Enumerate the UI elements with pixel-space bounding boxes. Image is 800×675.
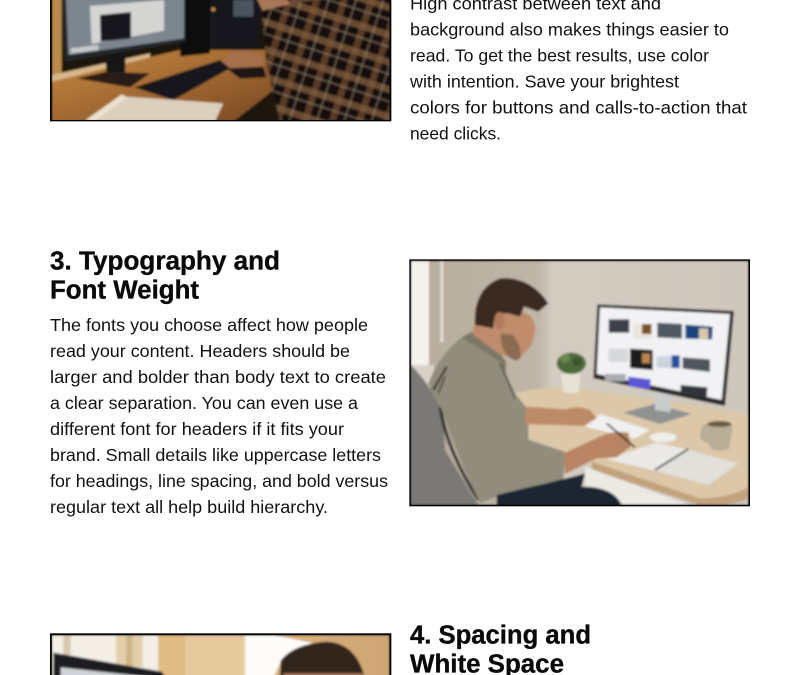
body text: typography section: regular text all help build hierarchy. [50,497,328,517]
photo: man at desk with plaid shirt and monitor [50,0,391,122]
body text: color section [409,0,747,144]
body text: typography section: The fonts you choose affect how people [50,315,368,335]
heading: 3. Typography and Font Weight: Font Weight [50,276,200,304]
body text: color section: with intention. Save your brightest [409,72,679,92]
body text: color section: colors for buttons and calls-to-action that [410,98,747,118]
body text: typography section: for headings, line spacing, and bold versus [50,471,388,491]
body text: typography section: a clear separation. You can even use a [50,393,358,413]
photo: man taking notes at desk with website on monitor [409,259,750,506]
heading: 3. Typography and Font Weight: 3. Typography and [50,248,280,276]
body text: color section: need clicks. [410,124,501,144]
body text: typography section: read your content. Headers should be [50,341,350,361]
body text: typography section: different font for headers if it fits your [50,419,344,439]
body text: typography section: brand. Small details like uppercase letters [50,445,381,465]
heading: 4. Spacing and White Space [410,622,591,675]
body text: color section: background also makes things easier to [410,20,729,40]
body text: color section: read. To get the best results, use color [410,46,709,66]
heading: 3. Typography and Font Weight [50,248,280,304]
photo: man in warm room with monitor, top portion [50,633,391,675]
body text: typography section: larger and bolder than body text to create [50,367,386,387]
body text: typography section [50,315,388,517]
heading: 4. Spacing and White Space: 4. Spacing and [410,622,591,650]
